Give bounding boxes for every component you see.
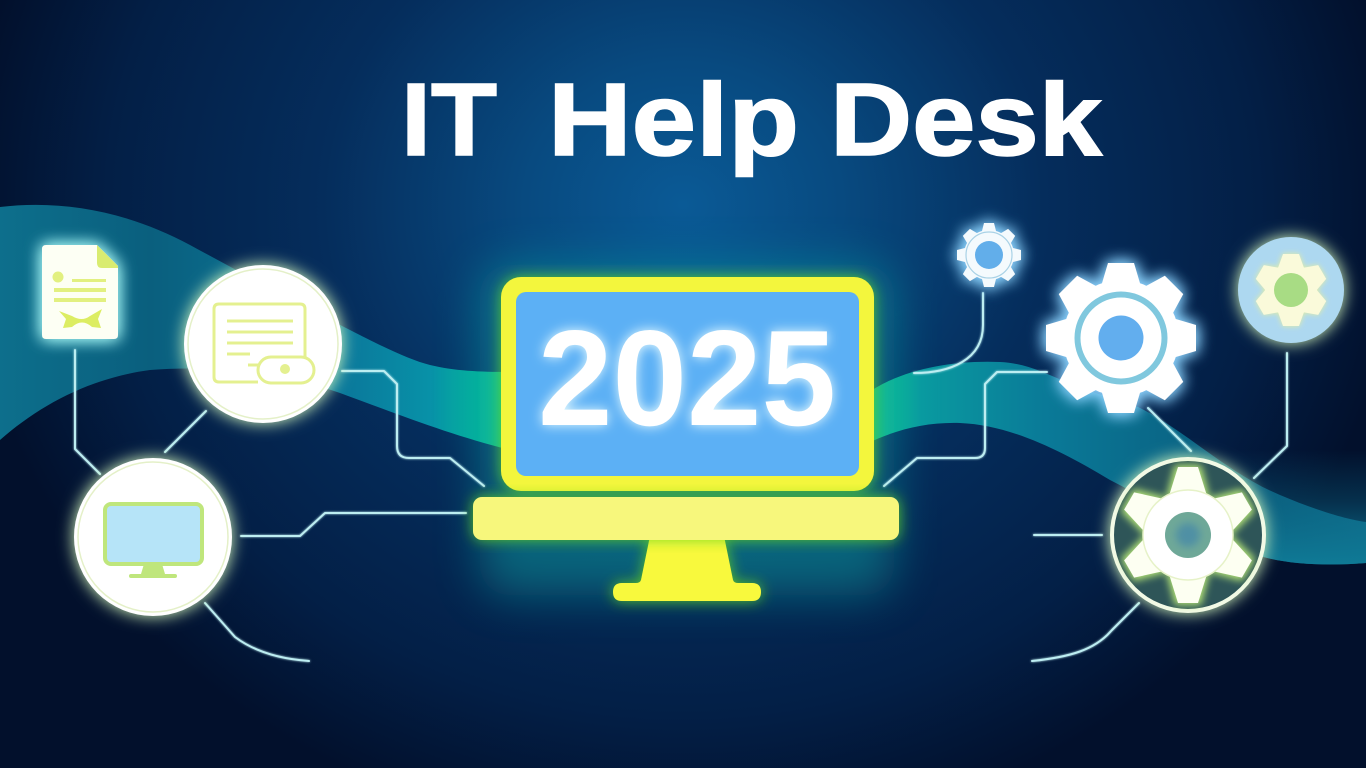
monitor: year: 2025 xyxy=(538,302,836,454)
monitor xyxy=(473,277,899,601)
wave: right ribbon lower fade xyxy=(1180,450,1366,565)
monitor: screen xyxy=(501,277,874,491)
wave: right ribbon xyxy=(866,362,1366,565)
monitor: base bar xyxy=(473,497,899,540)
connector lines xyxy=(75,293,1287,661)
title xyxy=(401,62,1103,177)
icon: form circle xyxy=(184,265,342,423)
wave: left ribbon xyxy=(0,205,510,450)
icon: gear badge xyxy=(1238,237,1344,343)
title: Desk xyxy=(830,62,1103,177)
icon: document xyxy=(42,245,118,339)
icon: small gear xyxy=(957,223,1021,287)
title: Help xyxy=(548,62,799,177)
title: IT xyxy=(401,62,497,177)
monitor: stand xyxy=(613,536,761,601)
monitor halo xyxy=(480,265,894,595)
icon: wheel circle xyxy=(1112,459,1264,611)
icon: large gear xyxy=(1046,263,1196,413)
icon: monitor circle xyxy=(74,458,232,616)
